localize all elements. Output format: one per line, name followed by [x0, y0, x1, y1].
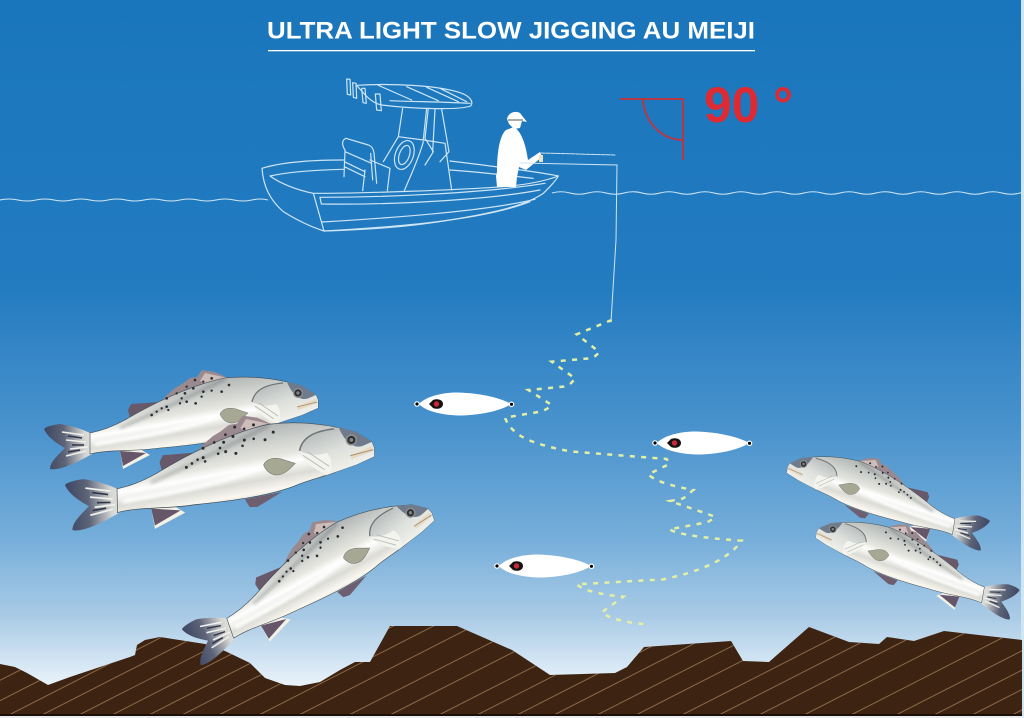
icon: angler	[496, 112, 543, 187]
icon: console and T-top	[347, 79, 472, 191]
lure: top	[414, 392, 514, 416]
right edge strip	[1021, 0, 1024, 718]
lure: bottom	[494, 554, 594, 578]
bottom edge	[0, 716, 1024, 718]
lure: middle	[652, 432, 752, 454]
angle label: 90 °	[704, 77, 793, 133]
fish: lower left	[163, 485, 454, 668]
fishing rod and line	[520, 153, 617, 322]
title: ULTRA LIGHT SLOW JIGGING AU MEIJI	[267, 18, 755, 44]
water surface line	[0, 192, 1024, 201]
seabed terrain	[0, 626, 1022, 716]
angle marker 90 degrees	[620, 99, 683, 160]
boat with angler	[262, 79, 558, 231]
fish: lower right	[808, 509, 1024, 621]
fish: top left	[44, 370, 318, 469]
fish: middle left	[64, 414, 375, 531]
jig path dashed yellow	[505, 320, 742, 624]
icon: boat hull	[262, 160, 558, 231]
fish: upper right	[779, 444, 997, 551]
icon: boat seat	[343, 138, 390, 191]
